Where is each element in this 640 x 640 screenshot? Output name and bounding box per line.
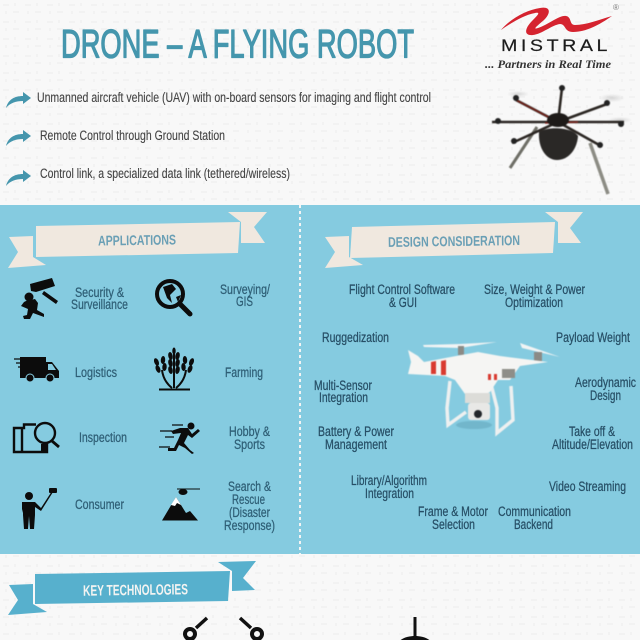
ribbon: applications: APPLICATIONS xyxy=(98,231,176,249)
label: security: Surveillance xyxy=(71,297,128,312)
drone photo: octocopter xyxy=(492,85,632,194)
label: search and rescue: (Disaster xyxy=(229,505,270,520)
icon: wheat xyxy=(153,348,195,390)
design labels: Management xyxy=(325,437,387,452)
icon: security camera and runner xyxy=(21,278,58,319)
design labels: Frame & Motor xyxy=(418,504,488,519)
label: hobby: Hobby & xyxy=(229,424,270,439)
label: search and rescue: Search & xyxy=(228,479,271,494)
design labels: Communication xyxy=(498,504,571,519)
design labels: Ruggedization xyxy=(322,330,389,345)
ribbon: key technologies: KEY TECHNOLOGIES xyxy=(83,581,188,600)
design labels: Size, Weight & Power xyxy=(484,282,585,297)
ribbon: key technologies xyxy=(8,561,256,615)
design labels: Multi-Sensor xyxy=(314,378,372,393)
label: inspection: Inspection xyxy=(79,430,127,445)
panel: applications xyxy=(8,212,275,533)
icon: drone arms (partly visible) xyxy=(185,618,262,639)
label: surveying: GIS xyxy=(236,294,253,309)
title: DRONE – A FLYING ROBOT xyxy=(61,22,414,66)
label: consumer: Consumer xyxy=(75,497,124,512)
label: surveying: Surveying/ xyxy=(220,282,270,297)
design labels: Backend xyxy=(514,517,553,532)
label: security: Security & xyxy=(75,285,124,300)
icon: mountain and helicopter xyxy=(162,489,200,520)
bullet text 2: Remote Control through Ground Station xyxy=(40,128,225,143)
design labels: Selection xyxy=(432,517,475,532)
design labels: Integration xyxy=(365,486,414,501)
icon: globe magnifier xyxy=(157,281,190,314)
label: search and rescue xyxy=(224,479,275,533)
design labels: Integration xyxy=(319,390,368,405)
label: search and rescue: Rescue xyxy=(232,492,265,507)
icon: arrow 2 xyxy=(6,130,31,146)
design labels: Library/Algorithm xyxy=(351,473,427,488)
icon: delivery truck xyxy=(14,357,59,382)
ribbon: design consideration: DESIGN CONSIDERATION xyxy=(388,232,520,250)
ribbon: design consideration xyxy=(325,212,583,268)
icon: sprinter xyxy=(159,422,200,454)
design labels: Design xyxy=(590,388,621,403)
logo swoosh xyxy=(501,8,612,35)
panel: design consideration xyxy=(314,212,636,532)
icon: selfie person xyxy=(22,488,57,529)
icon: arrow 3 xyxy=(6,170,31,186)
bullet text 3: Control link, a specialized data link (tethered/wireless) xyxy=(40,166,290,181)
tagline: ... Partners in Real Time xyxy=(485,59,611,71)
bullet text 1: Unmanned aircraft vehicle (UAV) with on-board sensors for imaging and flight control xyxy=(37,90,431,105)
label: farming: Farming xyxy=(225,365,263,380)
logo: Mistral xyxy=(485,3,619,71)
blue panel xyxy=(0,205,640,554)
label: search and rescue: Response) xyxy=(224,518,275,533)
design labels xyxy=(314,282,636,532)
icon: arrow 1 xyxy=(6,92,31,108)
design labels: & GUI xyxy=(389,295,417,310)
drone photo: white quadcopter xyxy=(408,342,560,433)
icon: camera inspection xyxy=(14,423,59,452)
design labels: Optimization xyxy=(505,295,563,310)
registered mark: ® xyxy=(613,3,619,12)
design labels: Battery & Power xyxy=(318,424,394,439)
label: hobby: Sports xyxy=(234,437,265,452)
ribbon: applications xyxy=(8,212,267,268)
label: logistics: Logistics xyxy=(75,365,117,380)
label: security xyxy=(71,285,128,312)
wordmark: MISTRAL xyxy=(501,37,611,55)
icon: antenna dome (partly visible) xyxy=(400,617,430,640)
bullet list xyxy=(6,90,431,186)
label: surveying xyxy=(220,282,270,309)
label: hobby xyxy=(229,424,270,452)
design labels: Flight Control Software xyxy=(349,282,455,297)
design labels: Take off & xyxy=(569,424,615,439)
